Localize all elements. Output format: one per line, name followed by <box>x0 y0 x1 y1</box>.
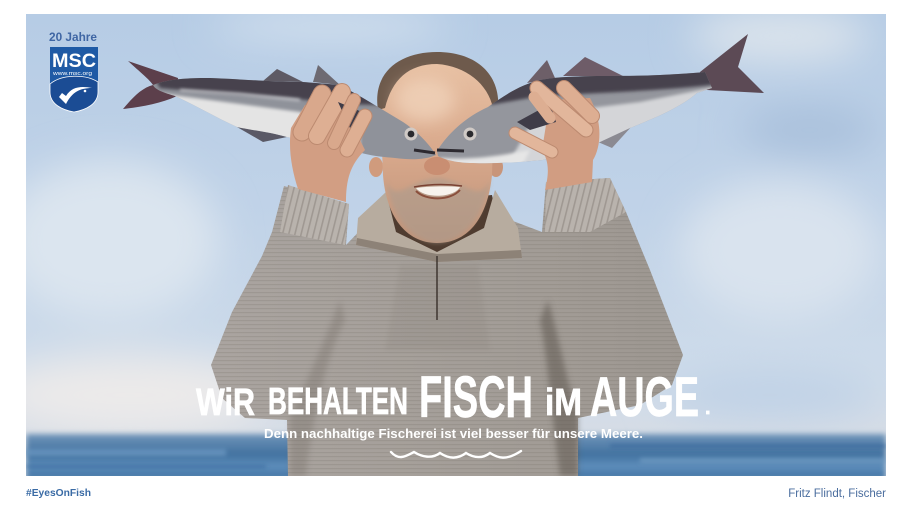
right fish <box>430 34 764 170</box>
eye <box>404 128 418 140</box>
subheadline: Denn nachhaltige Fischerei ist viel besser für unsere Meere. <box>264 426 643 441</box>
wave ornament <box>391 451 521 458</box>
headline: . <box>705 397 711 419</box>
credit: Fritz Flindt, Fischer <box>788 488 886 500</box>
headline: AUGE <box>590 365 699 428</box>
body <box>153 78 436 160</box>
hashtag: #EyesOnFish <box>26 487 91 499</box>
tail <box>123 61 178 109</box>
mouth <box>437 150 464 151</box>
collar <box>356 190 521 254</box>
pectoral fin <box>338 102 360 128</box>
cuff left <box>280 185 349 245</box>
sea <box>26 434 886 480</box>
fins <box>263 69 303 82</box>
headline <box>196 376 710 418</box>
shield <box>50 47 98 112</box>
right hand <box>515 88 599 190</box>
hair <box>377 52 498 112</box>
pectoral fin <box>517 108 556 130</box>
zipper <box>436 256 438 320</box>
ears <box>369 157 383 177</box>
headline: WiR <box>196 382 255 424</box>
man: sweater <box>211 178 683 476</box>
left hand <box>290 92 365 202</box>
sweater shading <box>540 300 578 476</box>
headline: iM <box>545 382 582 424</box>
mouth <box>414 185 462 198</box>
eye <box>464 128 476 140</box>
left fish <box>123 61 436 160</box>
headline: FISCH <box>419 365 533 430</box>
headline: BEHALTEN <box>268 381 408 423</box>
logo: MSC 20 Jahre <box>49 32 98 112</box>
man: head <box>369 52 503 243</box>
tail <box>697 34 764 93</box>
fish tick <box>59 87 92 104</box>
logo: MSC 20 Jahre: 20 Jahre <box>49 32 97 44</box>
logo: MSC 20 Jahre: MSC <box>52 51 96 72</box>
stubble <box>386 178 490 243</box>
neck shadow <box>389 195 493 252</box>
cuff right <box>545 178 626 232</box>
logo: MSC 20 Jahre: www.msc.org <box>53 71 92 77</box>
mouth <box>414 150 435 153</box>
nose <box>424 157 450 175</box>
forehead highlight <box>395 78 455 122</box>
